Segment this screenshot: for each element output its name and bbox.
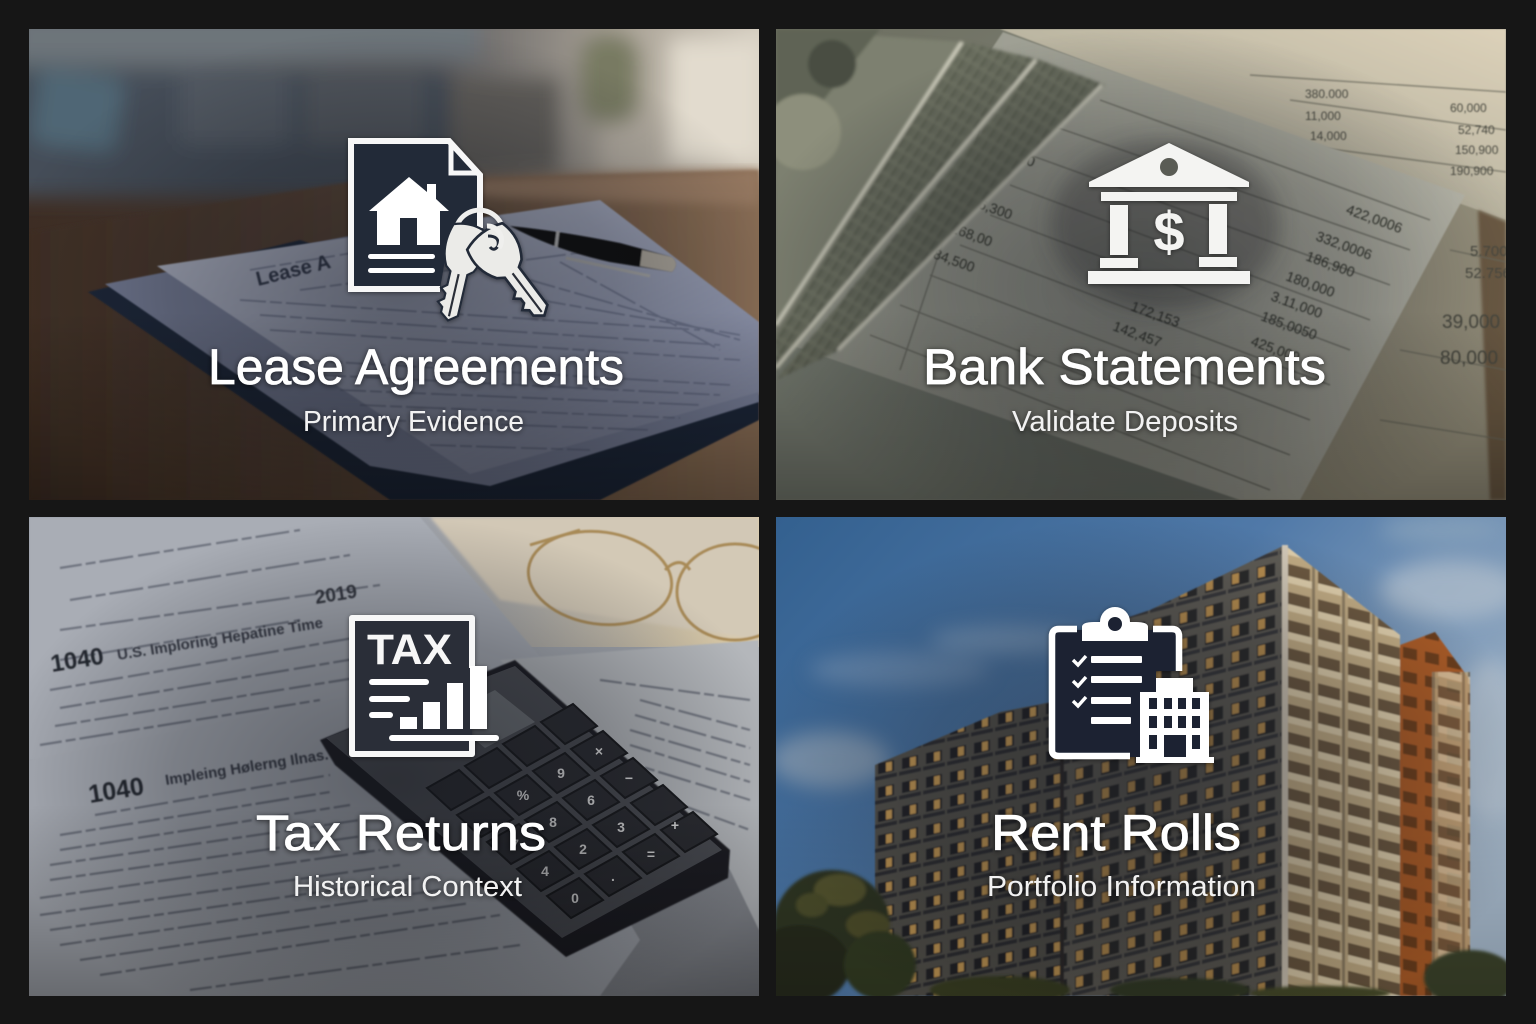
background statement figures: 80,000 <box>1440 348 1498 369</box>
statement figures: 84,00 <box>999 143 1038 170</box>
background statement figures: 60,000 <box>1450 101 1487 115</box>
subheading: Primary Evidence: Primary Evidence <box>303 406 524 438</box>
statement figures: 185,0050 <box>1259 308 1320 343</box>
statement figures: 268,00 <box>949 220 995 250</box>
panel: Tax Returns <box>29 517 793 996</box>
calculator key labels: 4 <box>541 863 549 879</box>
calculator key labels: 7 <box>511 836 519 852</box>
form label: 1040 upper: 1040 <box>49 643 106 678</box>
background statement figures: 150,900 <box>1455 143 1499 157</box>
calculator key labels: 8 <box>549 814 557 830</box>
calculator key labels: 0 <box>571 890 579 906</box>
calculator key labels: = <box>647 846 655 862</box>
statement figures: 425,000 <box>1249 333 1302 365</box>
form label: 1040 lower: 1040 <box>87 773 146 809</box>
calculator key labels: − <box>625 770 633 786</box>
icon: lease document with house and keys <box>351 141 564 330</box>
background statement figures: 52,740 <box>1458 123 1495 137</box>
calculator key labels: + <box>671 817 679 833</box>
background statement figures: 11,000 <box>1305 109 1341 123</box>
statement figures: 422,0006 <box>1344 201 1405 236</box>
statement figures: 3.11,000 <box>1269 288 1325 321</box>
icon: bank building with dollar sign: $ <box>1153 200 1185 263</box>
subheading: Portfolio Information: Portfolio Information <box>987 871 1256 903</box>
icon: tax form with bar chart: TAX <box>367 626 452 674</box>
building complex <box>875 545 1470 996</box>
calculator key labels: 9 <box>557 765 565 781</box>
background statement figures: 380.000 <box>1305 87 1349 101</box>
photo: apartment tower at dusk <box>750 516 1526 1006</box>
statement figures: 180,000 <box>1284 268 1337 300</box>
calculator key labels: % <box>517 787 530 803</box>
background statement figures: 52.756 <box>1465 265 1511 282</box>
calculator key labels: 3 <box>617 819 625 835</box>
background statement figures <box>1305 87 1511 369</box>
background statement figures: 39,000 <box>1442 312 1500 333</box>
form year: 2019 <box>313 582 359 609</box>
statement figures <box>924 143 1405 365</box>
statement figures: 784,500 <box>924 243 977 275</box>
photo: glasses <box>526 528 759 642</box>
panel: Bank Statements <box>765 29 1511 500</box>
background statement figures: 190,900 <box>1450 164 1494 178</box>
photo: lease papers, keys and pen on table <box>10 10 780 500</box>
icon: clipboard with checklist and building <box>1052 607 1214 763</box>
heading: Lease Agreements: Lease Agreements <box>208 339 624 395</box>
calculator key labels: × <box>595 743 603 759</box>
panel: Lease Agreements <box>10 10 780 500</box>
subheading: Validate Deposits: Validate Deposits <box>1012 406 1238 438</box>
photo: fanned banknotes <box>765 29 1105 380</box>
statement figures: 186,900 <box>1304 248 1357 280</box>
form title lower: Impleing Hølerng Ilnas. <box>164 746 330 789</box>
background statement figures: 5.700 <box>1470 243 1508 260</box>
photo: calculator <box>320 660 730 957</box>
calculator key labels <box>511 743 679 906</box>
photo: pen <box>510 226 676 276</box>
trees <box>750 870 1516 1006</box>
icon: tax form with bar chart <box>352 618 499 754</box>
icon: bank building with dollar sign <box>1088 143 1250 284</box>
statement figures: 332,0006 <box>1314 228 1375 263</box>
paper heading: Lease A <box>254 251 333 291</box>
statement figures: 172,153 <box>1129 298 1182 330</box>
panel: Rent Rolls <box>750 516 1526 1006</box>
heading: Tax Returns: Tax Returns <box>256 805 546 861</box>
statement figures: 142,457 <box>1111 318 1164 350</box>
statement figures: 36,300 <box>969 193 1015 223</box>
heading: Bank Statements: Bank Statements <box>923 339 1326 395</box>
subheading: Historical Context: Historical Context <box>293 871 522 903</box>
background statement figures: 14,000 <box>1310 129 1347 143</box>
photo: tax forms, calculator and glasses <box>29 517 793 996</box>
photo: bank statements and banknotes <box>765 29 1511 500</box>
heading: Rent Rolls: Rent Rolls <box>991 805 1241 861</box>
calculator key labels: . <box>611 868 615 884</box>
calculator key labels: 6 <box>587 792 595 808</box>
calculator key labels: 2 <box>579 841 587 857</box>
form title upper: U.S. Imploring Hepatine Time <box>116 615 324 664</box>
